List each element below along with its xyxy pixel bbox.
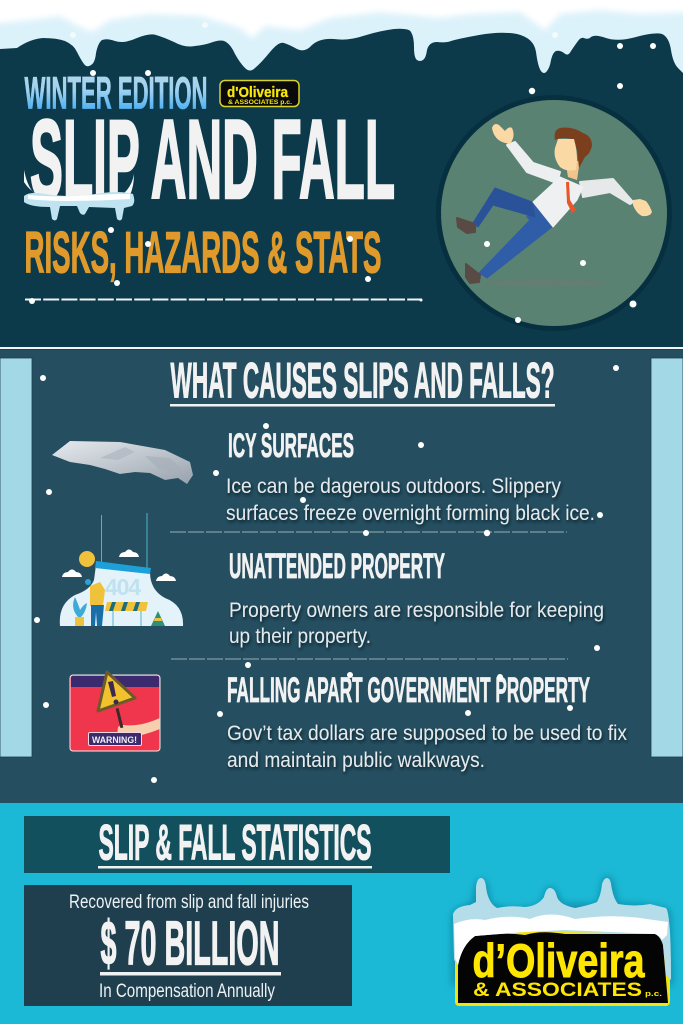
panel: what causes slips and falls bbox=[0, 350, 683, 804]
icon: warning window: WARNING! bbox=[92, 735, 137, 746]
falling snow dots bbox=[29, 22, 656, 783]
text block: falling apart government property bbox=[227, 671, 627, 772]
shoe one bbox=[457, 218, 475, 233]
right arm bbox=[580, 179, 633, 204]
left arm bbox=[507, 142, 560, 183]
icon: property under repair bbox=[60, 513, 183, 626]
left hand bbox=[492, 124, 514, 144]
panel: header background bbox=[0, 0, 683, 348]
illustration: falling man in circle bbox=[436, 95, 672, 331]
panel: compensation stat: In Compensation Annually bbox=[99, 981, 275, 1002]
panel: compensation stat: Recovered from slip and fall injuries bbox=[69, 892, 309, 913]
text block: falling apart government property: and maintain public walkways. bbox=[227, 749, 485, 772]
text: WINTER EDITION bbox=[24, 68, 208, 118]
shoe two bbox=[466, 264, 480, 283]
panel: statistics background bbox=[0, 803, 683, 1024]
text block: unattended property: UNATTENDED PROPERTY bbox=[229, 547, 445, 586]
icon: warning window bbox=[70, 672, 160, 751]
face bbox=[555, 139, 577, 171]
neck bbox=[566, 160, 580, 180]
lower leg bbox=[479, 203, 552, 278]
text block: unattended property bbox=[229, 547, 604, 648]
upper leg bbox=[473, 188, 535, 227]
logo: d'Oliveira and Associates with snow bbox=[452, 876, 673, 1006]
right hand bbox=[633, 199, 652, 216]
logo: d'Oliveira and Associates with snow: & ASSOCIATES bbox=[473, 980, 642, 1001]
tie bbox=[566, 182, 576, 213]
text block: unattended property: Property owners are responsible for keeping bbox=[229, 599, 604, 622]
text block: icy surfaces: ICY SURFACES bbox=[228, 427, 354, 465]
panel: compensation stat bbox=[24, 885, 352, 1006]
text block: icy surfaces: Ice can be dagerous outdoors. Slippery bbox=[226, 475, 561, 498]
logo: small d'Oliveira badge bbox=[220, 80, 299, 106]
torso bbox=[533, 177, 583, 227]
icon: property under repair: 404 bbox=[105, 574, 141, 600]
text block: unattended property: up their property. bbox=[229, 625, 371, 648]
text block: icy surfaces: surfaces freeze overnight forming black ice. bbox=[226, 502, 595, 525]
icon: ice sheet bbox=[52, 441, 193, 484]
logo: d'Oliveira and Associates with snow: p.c. bbox=[645, 989, 662, 998]
text block: falling apart government property: Gov’t tax dollars are supposed to be used to fix bbox=[227, 722, 627, 745]
panel: statistics heading: SLIP & FALL STATISTICS bbox=[98, 814, 372, 870]
snow border along the top bbox=[0, 0, 683, 73]
panel: compensation stat: $ 70 BILLION bbox=[100, 910, 280, 978]
logo: small d'Oliveira badge: & ASSOCIATES p.c. bbox=[228, 99, 292, 106]
text block: icy surfaces bbox=[226, 427, 595, 525]
icon: snow cap on title bbox=[24, 170, 134, 220]
right side bar bbox=[651, 358, 683, 757]
left side bar bbox=[0, 358, 32, 757]
logo: d'Oliveira and Associates with snow: d’Oliveira bbox=[472, 934, 645, 987]
panel: statistics heading bbox=[24, 814, 450, 873]
hair bbox=[555, 128, 592, 168]
logo: small d'Oliveira badge: d'Oliveira bbox=[227, 85, 289, 101]
